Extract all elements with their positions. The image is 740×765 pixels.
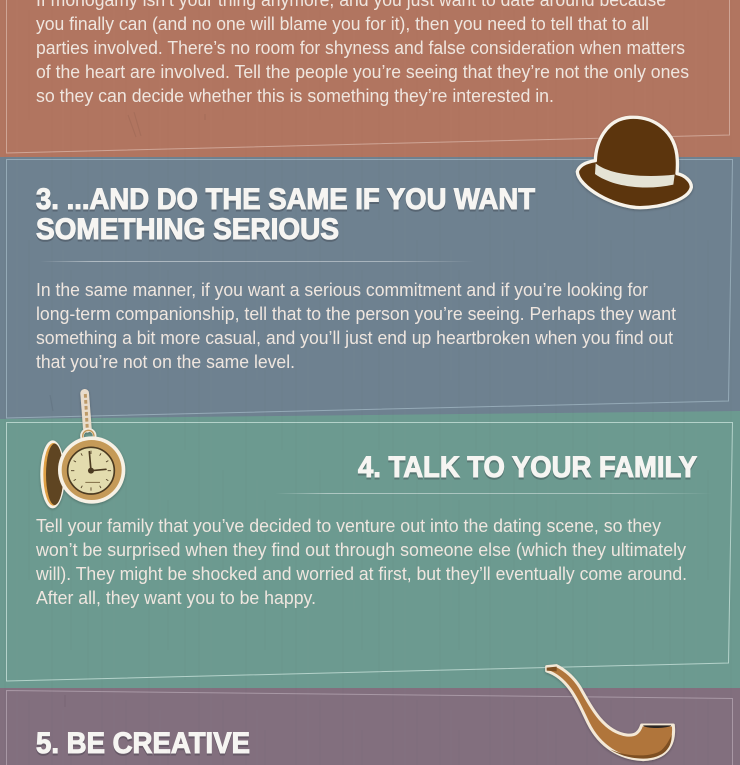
tip 2 body text: parties involved. There’s no room for shyness and false consideration when matters: [36, 38, 685, 58]
tip 2 body text: of the heart are involved. Tell the people you’re seeing that they’re not the only ones: [36, 62, 689, 82]
tip 4 body text: After all, they want you to be happy.: [36, 588, 316, 608]
tip 4 heading: 4. TALK TO YOUR FAMILY: [358, 451, 697, 484]
icon: bowler hat: [577, 117, 691, 208]
tip 3 heading: [36, 183, 535, 246]
icon: pocket watch: [40, 393, 125, 508]
tip 3 body text: that you’re not on the same level.: [36, 352, 295, 372]
tip 3 frame: [6, 160, 732, 418]
panel: tip 3: [0, 157, 740, 419]
watch chain: [82, 393, 95, 442]
tip 2 body text: so they can decide whether this is something they’re interested in.: [36, 86, 554, 106]
tip 4 frame: [6, 422, 732, 681]
tip 2 frame: [6, 0, 730, 153]
watch face: [58, 436, 125, 504]
tip 4 body text: Tell your family that you’ve decided to venture out into the dating scene, so they: [36, 516, 661, 536]
tip 4 body text: will). They might be shocked and worried at first, but they’ll eventually come around.: [35, 564, 687, 584]
tip 3 body text: [36, 280, 676, 372]
tip 3 body text: something a bit more casual, and you’ll just end up heartbroken when you find out: [36, 328, 673, 348]
icon: smoking pipe: [547, 666, 674, 760]
tip 5 heading: 5. BE CREATIVE: [36, 727, 250, 760]
tip 3 heading: 3. ...AND DO THE SAME IF YOU WANT: [36, 183, 535, 216]
tip 4 body text: [35, 516, 687, 608]
tip 3 heading: SOMETHING SERIOUS: [36, 213, 339, 246]
tip 2 body text: you finally can (and no one will blame you for it), then you need to tell that to all: [36, 14, 649, 34]
hat band: [595, 163, 675, 188]
tip 5 frame: [6, 690, 732, 765]
tip 3 body text: In the same manner, if you want a serious commitment and if you’re looking for: [36, 280, 648, 300]
panel: tip 2 background: [0, 0, 740, 158]
tip 2 body text: [36, 0, 689, 106]
panel: tip 5: [0, 688, 740, 765]
tip 4 body text: won’t be surprised when they find out through someone else (which they ultimately: [35, 540, 686, 560]
panel: tip 4: [0, 411, 740, 688]
watch lid: [40, 440, 65, 508]
tip 3 body text: long-term companionship, tell that to the person you’re seeing. Perhaps they want: [36, 304, 676, 324]
